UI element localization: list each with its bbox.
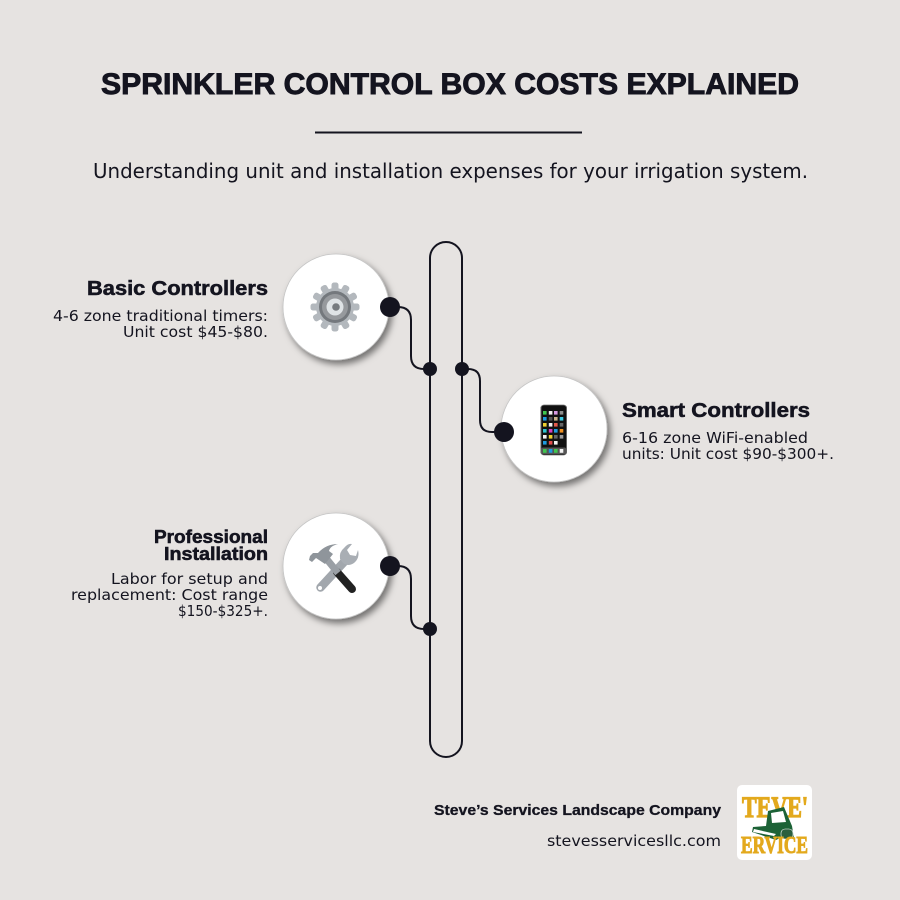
wrench: [318, 544, 358, 590]
footer: website: stevesservicesllc.com: [547, 832, 721, 850]
connector dot: [380, 556, 400, 576]
description: Labor for setup and: [111, 570, 268, 588]
hammer: [309, 544, 352, 589]
connector dot: [380, 297, 400, 317]
icon: gear: [310, 282, 360, 332]
heading: Smart Controllers: [622, 400, 810, 422]
panel: professional installation: [71, 513, 400, 620]
description: [622, 429, 834, 463]
heading: Installation: [164, 544, 268, 564]
description: 6-16 zone WiFi-enabled: [622, 429, 808, 447]
central timeline track: [430, 242, 462, 757]
icon circle: phone: [501, 376, 607, 482]
skid steer: [752, 807, 794, 840]
description: Unit cost $45-$80.: [123, 323, 268, 341]
subtitle: Understanding unit and installation expenses for your irrigation system.: [93, 159, 808, 183]
timeline nodes: [423, 362, 469, 636]
heading: Basic Controllers: [87, 278, 268, 300]
heading: [154, 527, 268, 564]
description: $150-$325+.: [178, 602, 268, 620]
heading: Professional: [154, 527, 268, 547]
panel: smart controllers: [494, 376, 834, 482]
icon circle: gear: [283, 254, 389, 360]
description: units: Unit cost $90-$300+.: [622, 445, 834, 463]
logo: TEVE': [742, 791, 808, 824]
logo: [737, 785, 812, 860]
title: SPRINKLER CONTROL BOX COSTS EXPLAINED: [101, 68, 799, 101]
connector: professional installation: [390, 566, 430, 629]
panel: basic controllers: [53, 254, 400, 360]
description: [53, 307, 268, 341]
connector: smart controllers: [462, 369, 504, 432]
icon: smartphone: [540, 405, 567, 455]
icon circle: tools: [283, 513, 389, 619]
description: replacement: Cost range: [71, 586, 268, 604]
icon: hammer and wrench: [309, 544, 358, 590]
connector: basic controllers: [390, 307, 430, 369]
footer: company name: Steve’s Services Landscape Company: [434, 802, 722, 819]
description: 4-6 zone traditional timers:: [53, 307, 268, 325]
description: [71, 570, 268, 620]
connector dot: [494, 422, 514, 442]
logo: ERVICE: [741, 833, 808, 859]
